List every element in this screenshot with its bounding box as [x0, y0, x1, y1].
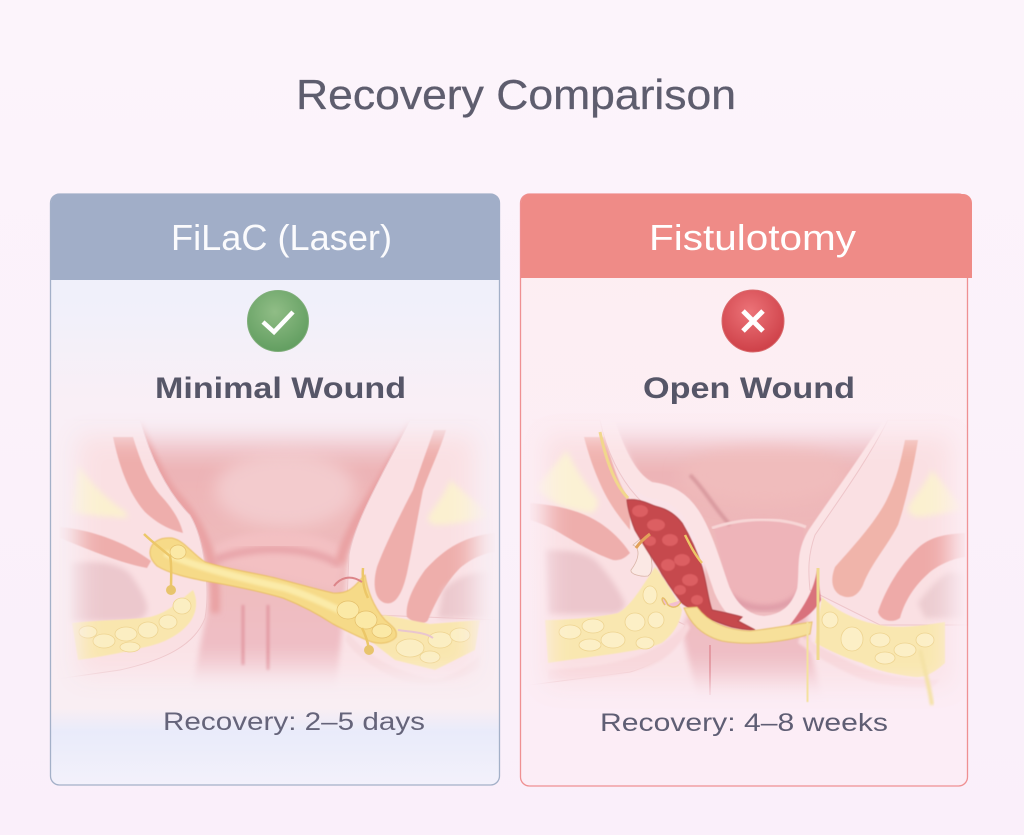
header label: Fistulotomy: [649, 217, 856, 258]
illustration: open wound anatomy: [532, 426, 964, 706]
icon: red cross: [722, 290, 784, 352]
subheading: Open Wound: [643, 372, 855, 405]
card body: [50, 194, 500, 785]
icon: green check: [248, 290, 308, 352]
recovery text: Recovery: 4–8 weeks: [600, 709, 888, 737]
subheading: Minimal Wound: [155, 372, 406, 405]
fistula tract: [684, 568, 932, 705]
panel: Fistulotomy: [520, 194, 972, 786]
title: Recovery Comparison: [296, 71, 736, 118]
card header: [521, 194, 972, 278]
header label: FiLaC (Laser): [171, 217, 392, 258]
illustration: minimal wound anatomy: [64, 424, 488, 680]
panel: FiLaC laser: [50, 194, 500, 785]
fistula tract: [144, 534, 433, 682]
card header: [51, 194, 500, 280]
recovery text: Recovery: 2–5 days: [163, 708, 425, 736]
granulation wound: [600, 432, 755, 630]
card body: [520, 194, 968, 786]
